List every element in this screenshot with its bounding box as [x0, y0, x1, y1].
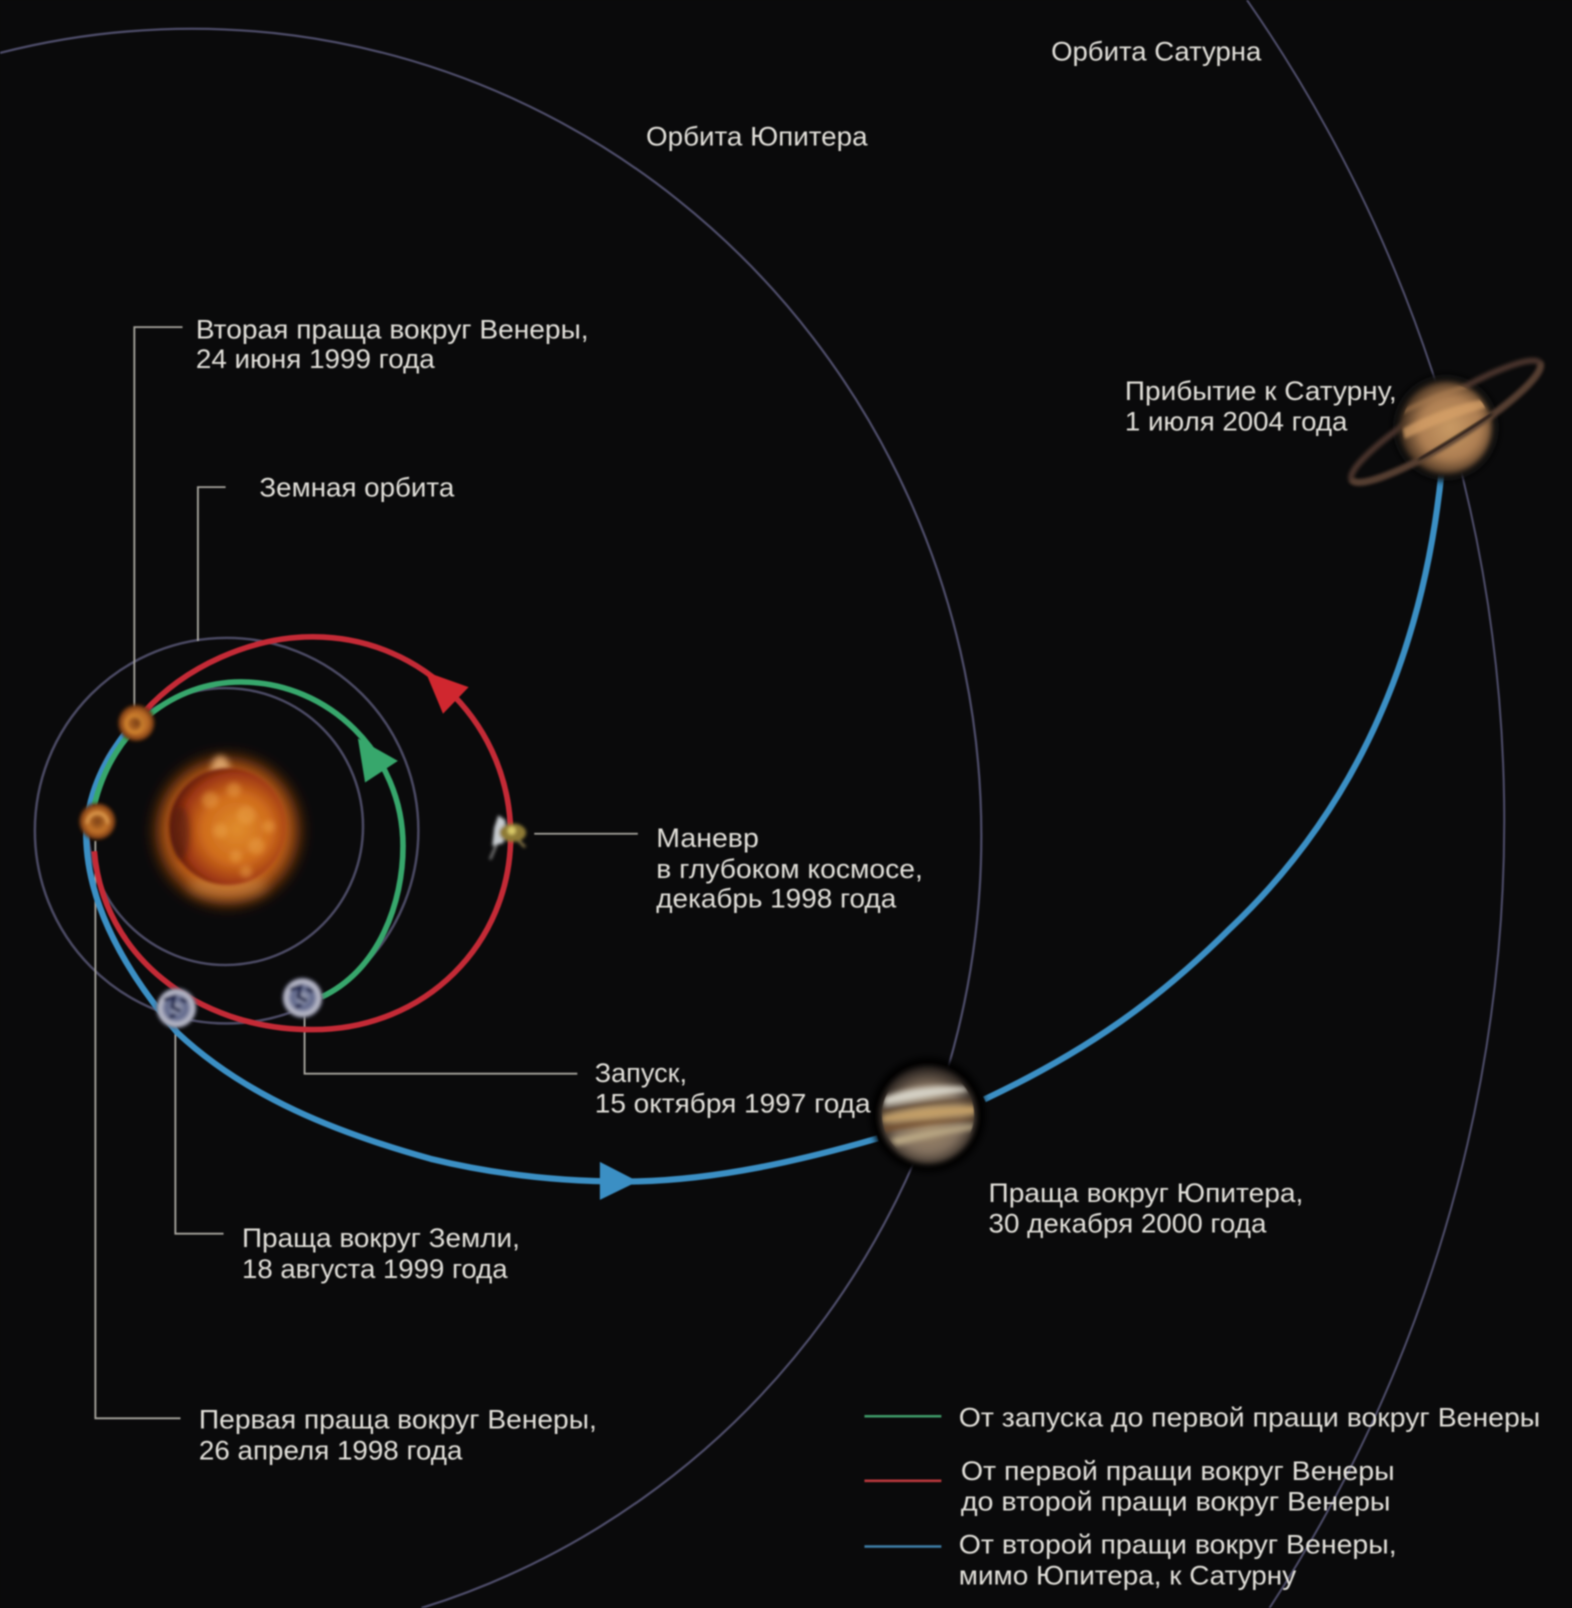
- label: deep space maneuver: в глубоком космосе,: [656, 853, 923, 884]
- icon: Earth, flyby: [156, 988, 197, 1029]
- legend item: red: От первой пращи вокруг Венеры: [961, 1455, 1395, 1486]
- icon: Earth, launch: [282, 977, 323, 1018]
- icon: Jupiter: [871, 1057, 985, 1172]
- label: deep space maneuver: [656, 822, 923, 914]
- green trajectory: launch to first Venus flyby: [94, 682, 403, 997]
- label: Jupiter flyby: Праща вокруг Юпитера,: [989, 1177, 1303, 1208]
- label: arrival at Saturn: [1125, 375, 1397, 437]
- legend: [864, 1401, 1540, 1590]
- label: second Venus flyby: Вторая праща вокруг Венеры,: [196, 313, 589, 344]
- legend item: red: до второй пращи вокруг Венеры: [961, 1486, 1390, 1517]
- legend item: red: [864, 1455, 1395, 1517]
- label: second Venus flyby: 24 июня 1999 года: [196, 343, 436, 374]
- label: launch: 15 октября 1997 года: [595, 1088, 872, 1119]
- legend item: blue: [864, 1529, 1397, 1590]
- icon: Venus, second flyby: [118, 705, 155, 741]
- label: first Venus flyby: Первая праща вокруг Венеры,: [199, 1404, 597, 1435]
- label: second Venus flyby: [196, 313, 589, 374]
- blue arrowhead: [600, 1162, 638, 1200]
- label: Earth orbit: Земная орбита: [259, 471, 455, 502]
- red arrowhead: [426, 672, 469, 714]
- Venus orbit: [88, 688, 363, 965]
- label: Earth flyby: [242, 1222, 520, 1284]
- label: deep space maneuver: декабрь 1998 года: [656, 883, 897, 914]
- label: Saturn orbit: Орбита Сатурна: [1051, 36, 1262, 67]
- label: arrival at Saturn: Прибытие к Сатурну,: [1125, 375, 1397, 406]
- green arrowhead: [358, 738, 398, 782]
- red trajectory: first to second Venus flyby: [94, 637, 511, 1030]
- icon: Venus, first flyby: [79, 803, 116, 840]
- blue trajectory: Venus to Saturn: [86, 470, 1442, 1181]
- legend item: blue: От второй пращи вокруг Венеры,: [959, 1529, 1397, 1560]
- Earth orbit: [35, 638, 418, 1023]
- label: first Venus flyby: 26 апреля 1998 года: [199, 1434, 463, 1465]
- label: Jupiter orbit: Орбита Юпитера: [646, 121, 868, 152]
- label: launch: [595, 1057, 872, 1119]
- legend item: blue: мимо Юпитера, к Сатурну: [959, 1559, 1297, 1590]
- label: launch: Запуск,: [595, 1057, 687, 1088]
- label: first Venus flyby: [199, 1404, 597, 1465]
- label: deep space maneuver: Маневр: [656, 822, 759, 853]
- icon: spacecraft: [490, 815, 526, 859]
- icon: Saturn: [1346, 356, 1546, 488]
- icon: Sun: [148, 749, 308, 913]
- Jupiter orbit: [0, 29, 981, 1608]
- label: Earth flyby: 18 августа 1999 года: [242, 1253, 508, 1284]
- label: Earth flyby: Праща вокруг Земли,: [242, 1222, 520, 1253]
- label: Jupiter flyby: [989, 1177, 1303, 1239]
- legend item: green: От запуска до первой пращи вокруг Венеры: [959, 1401, 1540, 1432]
- leader lines: [95, 327, 638, 1418]
- Saturn orbit: [1247, 0, 1504, 1608]
- label: arrival at Saturn: 1 июля 2004 года: [1125, 406, 1348, 437]
- label: Jupiter flyby: 30 декабря 2000 года: [989, 1208, 1267, 1239]
